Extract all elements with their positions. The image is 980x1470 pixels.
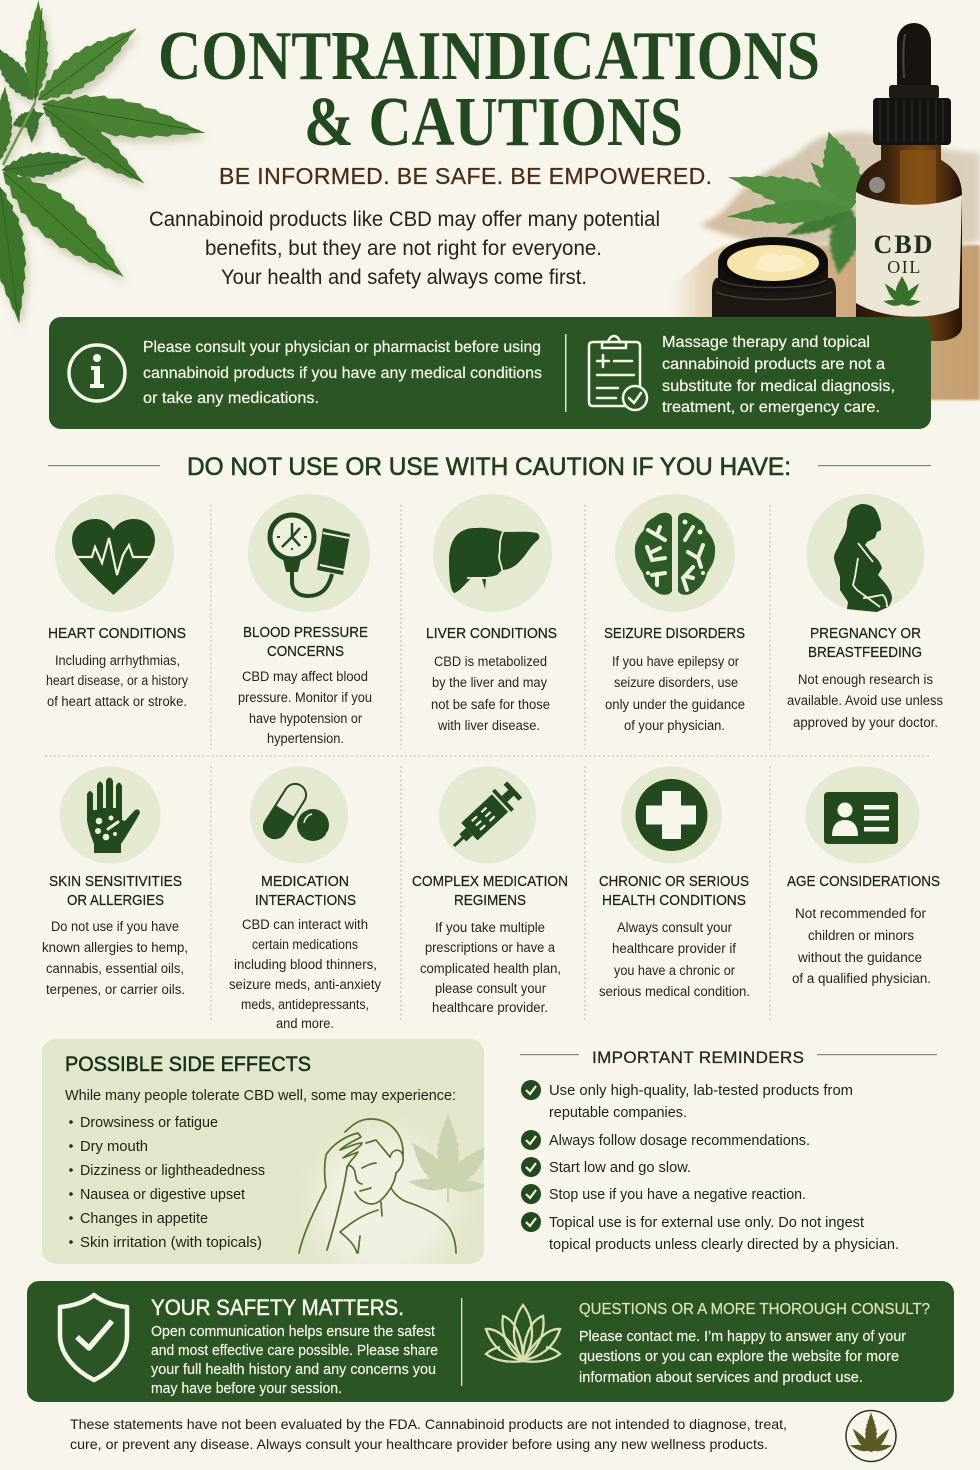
background leaf [724, 126, 870, 278]
panel: safety banner [27, 1281, 954, 1402]
card: blood pressure: hypertension. [267, 731, 344, 746]
card: seizure disorders [604, 494, 745, 733]
card: skin sensitivities: known allergies to hemp, [42, 940, 188, 955]
card: blood pressure: BLOOD PRESSURE [243, 624, 368, 641]
card: blood pressure: pressure. Monitor if you [238, 690, 372, 705]
card: liver conditions: not be safe for those [431, 697, 550, 712]
footer disclaimer: These statements have not been evaluated by the FDA. Cannabinoid products are not intended to diagnose, treat, [70, 1416, 787, 1432]
reminders checklist: Topical use is for external use only. Do not ingest [549, 1214, 865, 1231]
substitute text: treatment, or emergency care. [662, 399, 880, 416]
card: liver conditions: with liver disease. [437, 718, 540, 733]
side effects list [69, 1114, 265, 1251]
safety heading: YOUR SAFETY MATTERS. [151, 1295, 404, 1320]
card: blood pressure: CBD may affect blood [242, 669, 368, 684]
card: chronic or serious health conditions: Always consult your [617, 920, 732, 935]
card: heart conditions [46, 494, 188, 709]
side effects list: Nausea or digestive upset [80, 1186, 246, 1203]
icon: brain [615, 494, 735, 612]
icon: info [69, 345, 125, 401]
card: pregnancy or breastfeeding: Not enough research is [798, 672, 933, 687]
safety text: your full health history and any concerns you [151, 1362, 436, 1378]
reminders checklist: reputable companies. [549, 1104, 687, 1121]
icon: liver [433, 494, 552, 612]
card: liver conditions: CBD is metabolized [434, 654, 547, 669]
substitute text: cannabinoid products are not a [662, 356, 885, 373]
card: skin sensitivities: SKIN SENSITIVITIES [49, 873, 182, 890]
substitute text [662, 334, 895, 416]
card: seizure disorders: If you have epilepsy or [612, 654, 739, 669]
card: medication interactions: including blood thinners, [234, 957, 377, 972]
jar of balm [712, 237, 836, 322]
card: chronic or serious health conditions [599, 766, 750, 999]
icon: clipboard with check [589, 336, 647, 410]
card: chronic or serious health conditions: serious medical condition. [599, 984, 750, 999]
card: complex medication regimens: COMPLEX MEDICATION [412, 873, 568, 890]
title: CONTRAINDICATIONS [158, 18, 820, 95]
reminders checklist [521, 1080, 899, 1253]
icon: hand with rash [60, 766, 160, 864]
icon: pregnant silhouette [806, 494, 924, 612]
card: blood pressure: have hypotension or [249, 711, 362, 726]
card: pregnancy or breastfeeding: BREASTFEEDING [808, 644, 922, 661]
reminders checklist: Start low and go slow. [549, 1159, 691, 1176]
side effects list: Drowsiness or fatigue [80, 1114, 218, 1131]
consult text: Please consult your physician or pharmacist before using [143, 339, 541, 356]
card: medication interactions: INTERACTIONS [255, 892, 356, 909]
card: medication interactions: certain medications [252, 937, 358, 952]
intro paragraph [149, 208, 660, 289]
card: pregnancy or breastfeeding: approved by your doctor. [793, 715, 938, 730]
consult text [143, 339, 542, 407]
card: complex medication regimens: If you take multiple [435, 920, 545, 935]
card: medication interactions: meds, antidepressants, [241, 997, 369, 1012]
card: seizure disorders: seizure disorders, use [614, 675, 738, 690]
questions text [579, 1329, 906, 1386]
card: skin sensitivities: terpenes, or carrier oils. [46, 982, 185, 997]
section heading: DO NOT USE OR USE WITH CAUTION IF YOU HAVE: [187, 453, 791, 481]
important reminders heading: IMPORTANT REMINDERS [592, 1048, 804, 1067]
footer disclaimer: cure, or prevent any disease. Always consult your healthcare provider before using any new wellness products. [70, 1436, 768, 1452]
substitute text: Massage therapy and topical [662, 334, 870, 351]
card: pregnancy or breastfeeding [787, 494, 943, 730]
illustration: CBD oil bottle, jar and wood tray [670, 23, 980, 400]
card: heart conditions: heart disease, or a history [46, 673, 188, 688]
reminders checklist: Use only high-quality, lab-tested products from [549, 1082, 853, 1099]
check icons [521, 1080, 541, 1232]
icon: shield with check [60, 1295, 127, 1380]
icon: footer leaf logo [846, 1410, 896, 1462]
card: liver conditions: LIVER CONDITIONS [426, 625, 557, 642]
card: heart conditions: Including arrhythmias, [55, 653, 180, 668]
card: complex medication regimens: please consult your [435, 981, 546, 996]
card: heart conditions: of heart attack or stroke. [47, 694, 187, 709]
card: medication interactions: seizure meds, anti-anxiety [229, 977, 381, 992]
safety text [151, 1324, 438, 1397]
card: complex medication regimens: prescriptions or have a [425, 940, 555, 955]
card: chronic or serious health conditions: CHRONIC OR SERIOUS [599, 873, 749, 890]
dropper bottle [856, 23, 962, 341]
title: & CAUTIONS [304, 84, 683, 161]
intro paragraph: Your health and safety always come first. [221, 266, 587, 289]
card: seizure disorders: only under the guidance [605, 697, 745, 712]
icon: medical cross [621, 766, 722, 864]
safety text: Open communication helps ensure the safest [151, 1324, 435, 1340]
side effects intro: While many people tolerate CBD well, some may experience: [65, 1087, 456, 1104]
bottle label text: CBD [874, 230, 934, 259]
dropper bottle: OIL [887, 257, 922, 277]
illustration: person with headache [299, 1119, 456, 1253]
consult text: cannabinoid products if you have any medical conditions [143, 365, 542, 382]
card: age considerations: children or minors [808, 928, 914, 943]
card: pregnancy or breastfeeding: PREGNANCY OR [810, 625, 921, 642]
card: complex medication regimens: REGIMENS [454, 892, 526, 909]
safety text: may have before your session. [151, 1381, 342, 1397]
icon: blood pressure cuff [248, 494, 370, 612]
side effects list: Changes in appetite [80, 1210, 208, 1227]
panel: possible side effects [42, 1039, 497, 1275]
wood table [670, 245, 980, 400]
bottle label leaf [882, 276, 922, 307]
icon: syringe [439, 766, 536, 864]
consult text: or take any medications. [143, 390, 319, 407]
substitute text: substitute for medical diagnosis, [662, 378, 895, 395]
reminders checklist: Stop use if you have a negative reaction. [549, 1186, 806, 1203]
footer disclaimer [70, 1416, 787, 1452]
intro paragraph: benefits, but they are not right for everyone. [205, 237, 602, 260]
card: heart conditions: HEART CONDITIONS [48, 625, 186, 642]
reminders checklist: topical products unless clearly directed by a physician. [549, 1236, 899, 1253]
questions text: Please contact me. I’m happy to answer any of your [579, 1329, 906, 1345]
card: pregnancy or breastfeeding: available. Avoid use unless [787, 693, 943, 708]
icon: id card [806, 766, 920, 864]
card: medication interactions: and more. [276, 1016, 334, 1031]
icon: capsule and pill [250, 766, 348, 864]
panel: consult banner [49, 317, 931, 429]
card: age considerations: Not recommended for [795, 906, 927, 921]
side effects list: Dizziness or lightheadedness [80, 1162, 265, 1179]
reminders checklist: Always follow dosage recommendations. [549, 1132, 810, 1149]
beige fabric backdrop [700, 132, 980, 245]
card: seizure disorders: SEIZURE DISORDERS [604, 625, 745, 642]
card: blood pressure [238, 494, 372, 746]
card: chronic or serious health conditions: you have a chronic or [614, 963, 735, 978]
title [158, 18, 820, 161]
card: medication interactions [229, 766, 381, 1031]
illustration: cannabis leaves top left [0, 0, 209, 326]
icon: lotus [486, 1305, 560, 1362]
icon: heart [55, 494, 174, 612]
intro paragraph: Cannabinoid products like CBD may offer many potential [149, 208, 660, 231]
card: medication interactions: CBD can interact with [242, 917, 368, 932]
card: skin sensitivities [42, 766, 188, 997]
safety text: and most effective care possible. Please share [151, 1343, 438, 1359]
card: blood pressure: CONCERNS [267, 643, 344, 660]
questions text: information about services and product use. [579, 1370, 863, 1386]
card: liver conditions [426, 494, 557, 733]
side effects heading: POSSIBLE SIDE EFFECTS [65, 1053, 311, 1076]
card: chronic or serious health conditions: healthcare provider if [612, 941, 736, 956]
subtitle: BE INFORMED. BE SAFE. BE EMPOWERED. [219, 163, 712, 189]
card: complex medication regimens: complicated health plan, [420, 961, 561, 976]
card: complex medication regimens: healthcare provider. [432, 1000, 548, 1015]
card: seizure disorders: of your physician. [624, 718, 725, 733]
questions text: questions or you can explore the website for more [579, 1349, 899, 1365]
side effects list: Skin irritation (with topicals) [80, 1234, 262, 1251]
card: age considerations [787, 766, 940, 986]
card: age considerations: of a qualified physician. [792, 971, 931, 986]
card: age considerations: AGE CONSIDERATIONS [787, 873, 940, 890]
card: complex medication regimens [412, 766, 568, 1015]
card: skin sensitivities: OR ALLERGIES [67, 892, 164, 909]
card: age considerations: without the guidance [797, 950, 922, 965]
card: skin sensitivities: Do not use if you have [51, 919, 179, 934]
illustration: faded cannabis leaf [408, 1114, 484, 1203]
card: skin sensitivities: cannabis, essential oils, [46, 961, 184, 976]
side effects list: Dry mouth [80, 1138, 148, 1155]
questions heading: QUESTIONS OR A MORE THOROUGH CONSULT? [579, 1301, 930, 1318]
card: medication interactions: MEDICATION [261, 873, 349, 890]
card: chronic or serious health conditions: HEALTH CONDITIONS [602, 892, 746, 909]
card: liver conditions: by the liver and may [432, 675, 547, 690]
